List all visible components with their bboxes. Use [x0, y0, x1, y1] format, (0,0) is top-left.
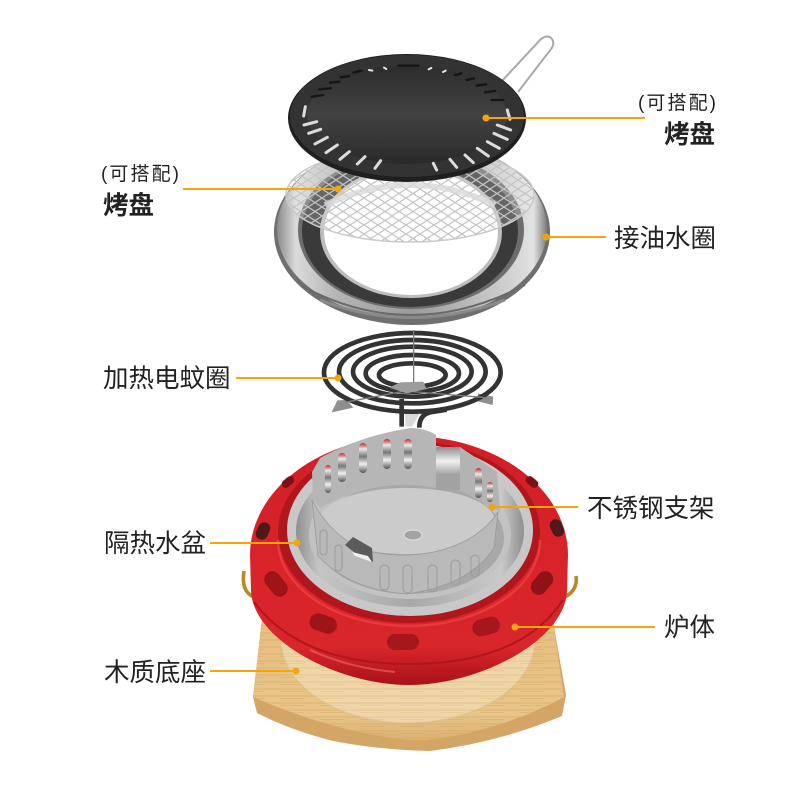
callout: water basin: [104, 530, 300, 558]
coil tail tubes: [405, 413, 420, 427]
callout: steel bracket: [488, 495, 715, 523]
stove vent holes: [254, 474, 566, 650]
red stove body: [250, 436, 568, 685]
folded tab: [345, 537, 373, 562]
center badge: [404, 530, 422, 540]
bracket right piece: [460, 447, 500, 512]
callout: oil ring: 接油水圈: [614, 225, 716, 253]
callout: wooden base: [104, 659, 300, 687]
stainless steel bracket: [312, 428, 500, 594]
griddle slots: [304, 66, 511, 170]
callout: heating coil: 加热电蚊圈: [103, 365, 231, 393]
brass side handles: [243, 571, 576, 597]
callout: griddle right: [482, 92, 716, 149]
callout: wooden base: 木质底座: [104, 659, 206, 687]
silver tube in gap: [436, 447, 461, 475]
callout: water basin: 隔热水盆: [104, 530, 206, 558]
callout: griddle right: 烤盘: [664, 121, 715, 149]
wire mesh grill: [286, 148, 534, 242]
bracket back wall: [312, 428, 436, 508]
callout: steel bracket: 不锈钢支架: [587, 495, 715, 523]
recessed circle: [281, 557, 535, 723]
callout: oil ring: [542, 225, 716, 253]
callout: griddle left: [101, 163, 342, 220]
callout: stove body: 炉体: [664, 614, 715, 642]
callout: stove body: [512, 614, 715, 642]
stove inner rim: [278, 441, 540, 623]
heating coil: [324, 330, 501, 428]
insulating water basin: [287, 444, 533, 616]
callout: griddle left: 烤盘: [103, 192, 154, 220]
oil-catching water ring: [274, 139, 550, 325]
callout: heating coil: [103, 365, 342, 393]
bracket front slot outlines: [320, 530, 479, 593]
bracket wall slots: [325, 439, 493, 502]
coil legs: [332, 393, 493, 412]
callout: griddle right: (可搭配): [638, 92, 716, 114]
griddle wire handle: [501, 36, 553, 92]
griddle plate: [288, 54, 526, 182]
wooden base: [253, 557, 566, 751]
callout: griddle left: (可搭配): [101, 163, 179, 185]
bracket front band: [312, 500, 498, 594]
bracket floor plate: [319, 488, 495, 554]
